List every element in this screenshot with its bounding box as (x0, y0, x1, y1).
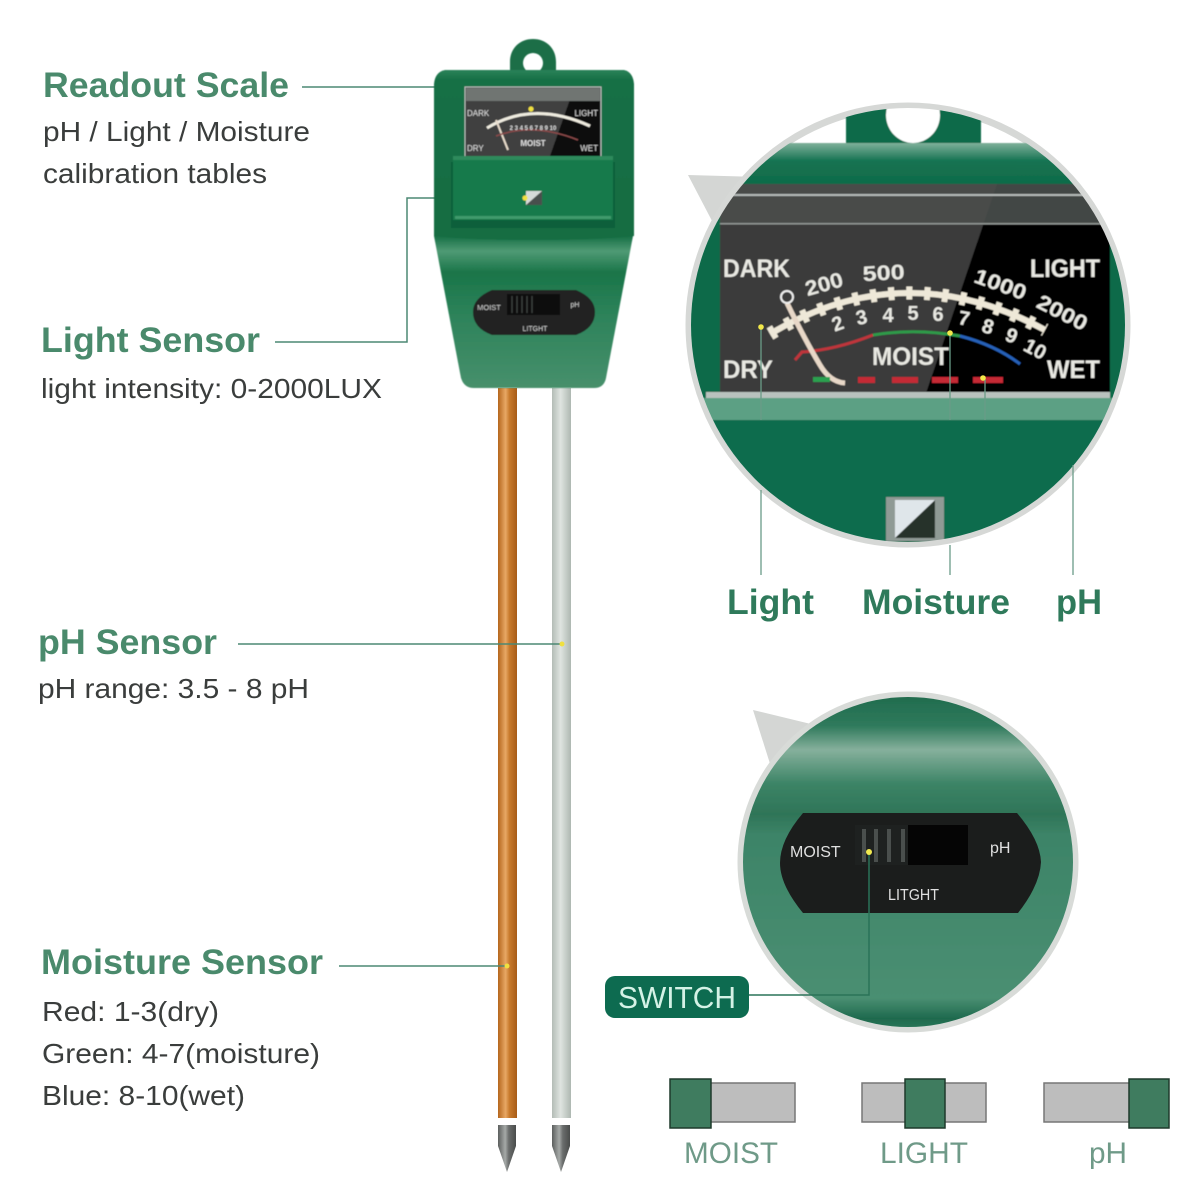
sensor flap (451, 162, 615, 228)
text block: Light Sensor: Light Sensor (41, 321, 260, 360)
magnified light sensor (886, 497, 944, 541)
legend: pH position: pH (1089, 1137, 1127, 1170)
panel labels: MOIST (790, 844, 841, 861)
legend: MOIST position (670, 1079, 795, 1170)
soil meter device: MOIST (477, 303, 501, 312)
moisture numbers: 7 (957, 307, 971, 331)
magnified dial circle: MOIST (872, 343, 949, 371)
dial window: WET (580, 144, 598, 153)
text block: pH Sensor: pH Sensor (38, 623, 217, 662)
body top band (742, 142, 1074, 185)
dial window: MOIST (520, 139, 546, 148)
leader dots (758, 324, 986, 381)
soil meter device: pH (571, 302, 579, 309)
magnified switch circle (738, 692, 1078, 1032)
magnified hook (845, 109, 982, 144)
text block: Light Sensor (41, 321, 382, 404)
switch dot (866, 849, 872, 855)
magnified dial circle (680, 87, 1140, 575)
callout leader lines (761, 328, 1073, 575)
text block: Readout Scale: Readout Scale (43, 66, 289, 105)
magnified window (719, 224, 984, 392)
text block: Moisture Sensor: Green: 4-7(moisture) (42, 1038, 320, 1069)
magnified switch circle: LITGHT (888, 887, 939, 904)
moisture numbers: 5 (907, 303, 919, 325)
moisture numbers: 9 (1002, 324, 1021, 349)
magnifier pointer: dial (688, 175, 760, 240)
text block: Moisture Sensor: Moisture Sensor (41, 943, 323, 982)
light scale arc (770, 293, 1045, 334)
magnified dial circle: 2000 (1033, 290, 1091, 335)
dial window: DRY (467, 144, 484, 153)
soil meter device (434, 39, 634, 388)
text block: Light Sensor: light intensity: 0-2000LUX (41, 373, 382, 404)
magnified dial circle: LIGHT (1030, 255, 1100, 283)
legend: pH position (1044, 1079, 1169, 1170)
text block: Moisture Sensor (41, 943, 323, 1111)
magnified switch circle: pH (990, 840, 1010, 857)
moisture numbers: 2 (829, 312, 847, 337)
hanging hook (510, 39, 556, 73)
bottom color marks (813, 377, 830, 382)
needle (787, 303, 845, 383)
soil meter device: LITGHT (523, 326, 548, 333)
dial window: 2 3 4 5 6 7 8 9 10 (510, 126, 557, 132)
light sensor icon (522, 191, 542, 205)
moisture numbers: 6 (932, 304, 944, 326)
connector lines to meter (238, 87, 562, 966)
text block: pH Sensor: pH range: 3.5 - 8 pH (38, 673, 309, 704)
probe marker dots (504, 642, 564, 968)
upper body (434, 70, 634, 240)
magnified dial circle: 500 (862, 260, 905, 286)
legend: LIGHT position (862, 1079, 986, 1170)
steel pH probe (552, 388, 571, 1172)
magnifier pointer: switch (753, 710, 815, 770)
text block: Moisture Sensor: Blue: 8-10(wet) (42, 1080, 245, 1111)
slider (855, 825, 968, 865)
dial labels: DARK (723, 255, 790, 283)
heading: Light: Light (727, 583, 814, 622)
legend: LIGHT position: LIGHT (880, 1137, 968, 1170)
text block: Moisture Sensor: Red: 1-3(dry) (42, 996, 219, 1027)
dial window (465, 87, 601, 157)
magnified dial circle: DRY (723, 356, 773, 384)
magnified dial circle: 1000 (971, 264, 1030, 305)
text block: Readout Scale (43, 66, 310, 189)
black switch panel (780, 813, 1041, 913)
heading: pH: pH (1056, 583, 1102, 622)
switch leader line (749, 852, 869, 995)
moisture numbers: 4 (882, 305, 894, 327)
heading: Moisture: Moisture (862, 583, 1010, 622)
dial window: LIGHT (574, 109, 598, 118)
moisture numbers: 8 (979, 315, 996, 339)
moisture numbers (831, 305, 1047, 360)
moisture scale arcs (795, 335, 873, 360)
circle background (738, 692, 1078, 1032)
copper moisture probe (498, 388, 517, 1172)
magnified dial circle: WET (1047, 356, 1100, 384)
lower body (434, 236, 633, 388)
SWITCH pill: SWITCH (618, 980, 736, 1015)
text block: Readout Scale: calibration tables (43, 158, 267, 189)
dial window: DARK (467, 109, 490, 118)
moisture numbers: 3 (854, 306, 869, 330)
text block: pH Sensor (38, 623, 309, 704)
switch panel (473, 290, 595, 335)
text block: Readout Scale: pH / Light / Moisture (43, 116, 310, 147)
light numbers: 200 (802, 267, 846, 301)
legend: MOIST position: MOIST (684, 1137, 778, 1170)
moisture numbers: 10 (1020, 335, 1050, 365)
